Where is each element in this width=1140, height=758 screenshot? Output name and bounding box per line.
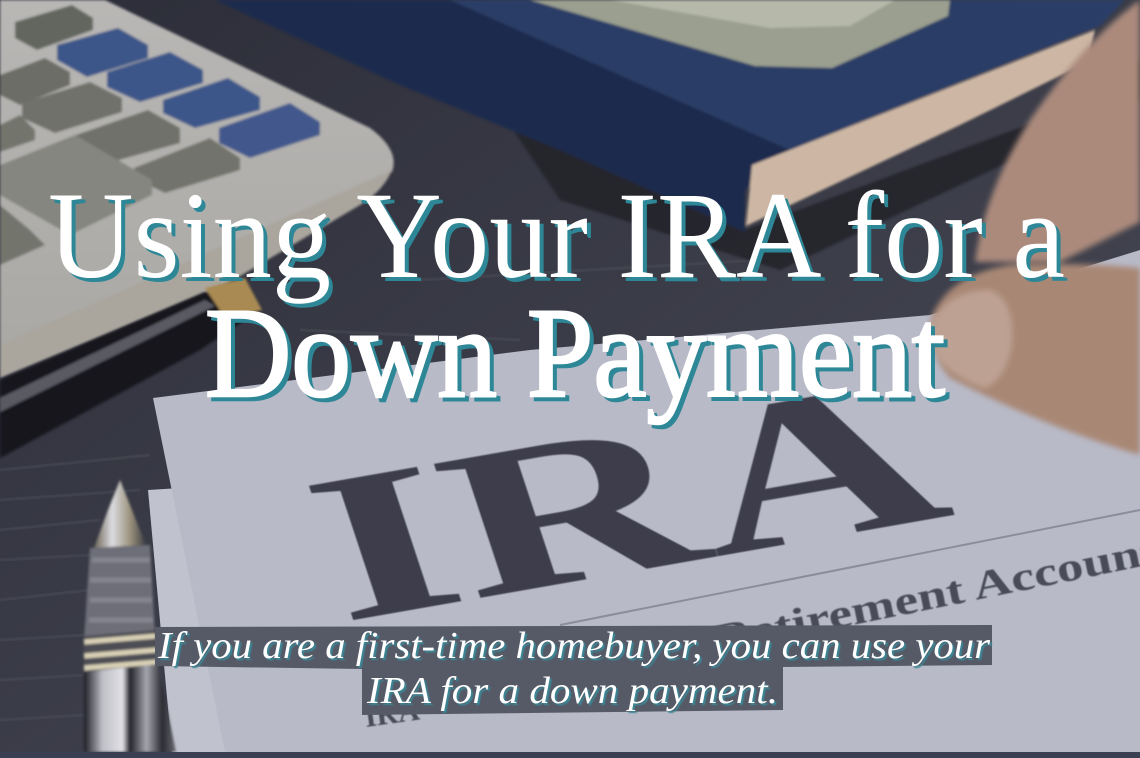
fountain pen [84,480,176,752]
black pen beside calculator [0,278,262,458]
printed IRA lettering on the sheet: IRA [362,694,422,734]
printed IRA lettering on the sheet: IRA [282,332,972,666]
title [48,167,1065,424]
subtitle callout [155,625,992,715]
calculator keys [0,5,320,265]
document sheet [148,250,1140,752]
hand [930,0,1140,455]
blue notebook with money [215,0,1140,270]
title line 2: Down Payment [205,282,945,424]
title line 1: Using Your IRA for a [48,167,1065,304]
calculator [0,0,394,378]
printed IRA lettering on the sheet [308,396,1140,728]
bottom strip [0,752,1140,758]
subtitle line 2: IRA for a down payment. [366,670,778,712]
printed IRA lettering on the sheet: Individual Retirement Account [467,527,1140,711]
subtitle highlight band [155,625,992,715]
subtitle line 1: If you are a first-time homebuyer, you can use your [157,625,990,667]
